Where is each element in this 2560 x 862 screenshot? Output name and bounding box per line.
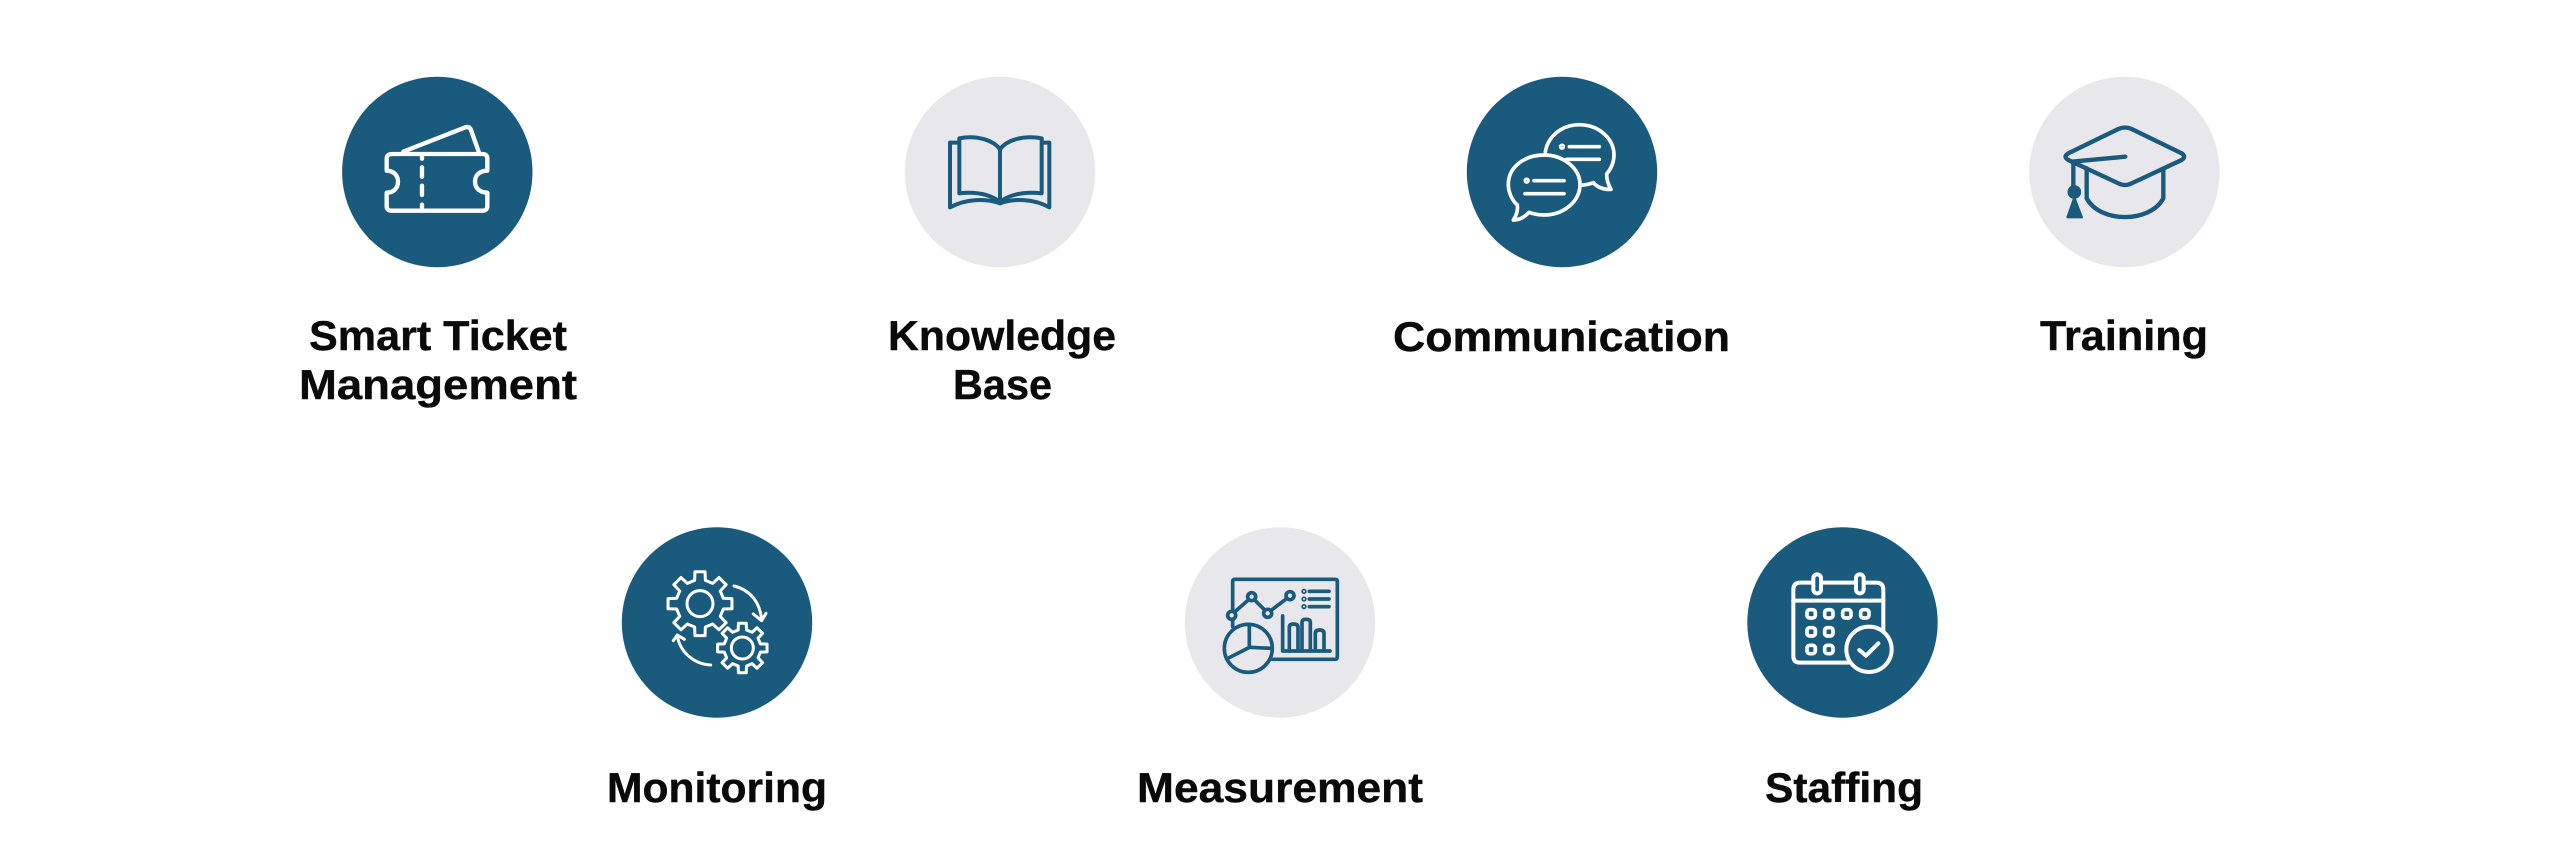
icon: tickets — [387, 127, 487, 211]
label: Monitoring: Monitoring — [607, 764, 827, 811]
label: Staffing: Staffing — [1765, 764, 1923, 811]
panel: Training — [2029, 77, 2220, 359]
icon: rotating gears — [668, 572, 767, 673]
icon: open book — [950, 137, 1049, 207]
label: Communication: Communication — [1393, 313, 1730, 360]
icon: calendar with check — [1793, 574, 1892, 672]
circle badge: gears — [622, 527, 812, 718]
panel: Measurement — [1137, 527, 1423, 811]
circle badge: calendar — [1747, 527, 1938, 718]
label: Knowledge Base: Base — [953, 361, 1052, 408]
icon: chat bubbles — [1508, 125, 1614, 220]
label: Smart Ticket Management: Management — [299, 361, 577, 408]
label: Measurement: Measurement — [1137, 764, 1423, 811]
panel: Monitoring — [607, 527, 827, 811]
label: Knowledge Base — [888, 312, 1116, 408]
icon: graduation cap — [2065, 127, 2184, 217]
circle badge: book — [905, 77, 1095, 267]
label: Smart Ticket Management: Smart Ticket — [309, 312, 567, 359]
panel: Smart Ticket Management — [299, 77, 577, 408]
label: Knowledge Base: Knowledge — [888, 312, 1116, 359]
panel: Knowledge Base — [888, 77, 1116, 408]
circle badge: ticket — [342, 77, 532, 267]
panel: Communication — [1393, 77, 1730, 360]
circle badge: dashboard — [1185, 527, 1375, 718]
icon: analytics dashboard — [1224, 579, 1337, 672]
label: Training: Training — [2040, 312, 2208, 359]
label: Smart Ticket Management — [299, 312, 577, 408]
circle badge: graduation cap — [2029, 77, 2220, 267]
panel: Staffing — [1747, 527, 1938, 811]
circle badge: chat — [1467, 77, 1657, 267]
